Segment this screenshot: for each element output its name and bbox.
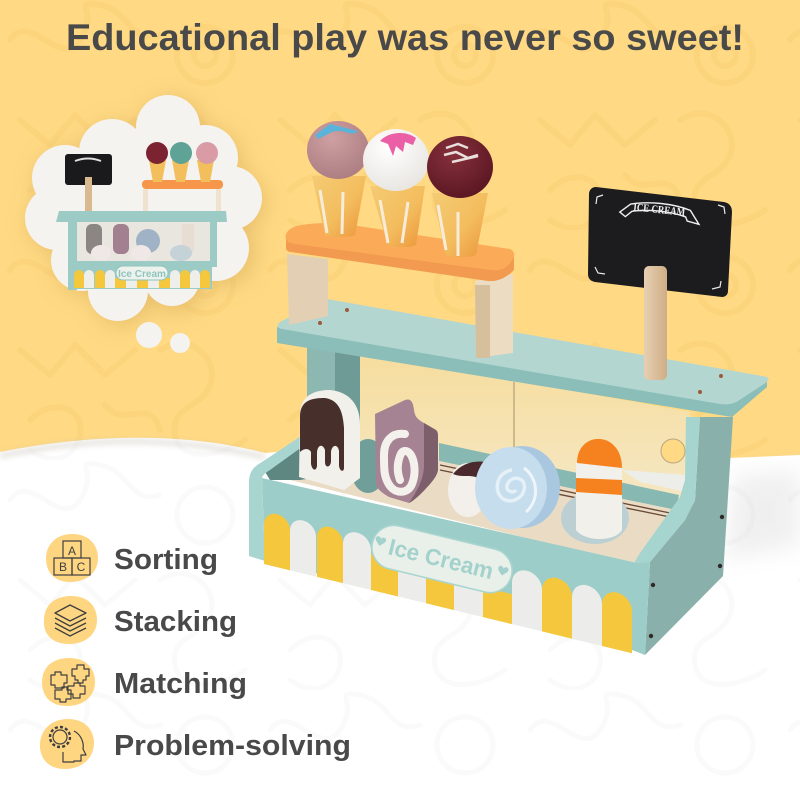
label: problem-solving: Problem-solving xyxy=(114,730,351,762)
bubble cloud xyxy=(25,95,262,353)
teal scoop behind popsicle xyxy=(350,439,386,493)
title: Educational play was never so sweet! xyxy=(66,17,744,58)
tray slot lines xyxy=(440,465,670,517)
front panel xyxy=(262,478,650,655)
label: stacking: Stacking xyxy=(114,606,237,638)
label: matching: Matching xyxy=(114,668,247,700)
skill: sorting xyxy=(46,534,218,582)
icon: abc blocks: A xyxy=(68,544,76,558)
mini counter xyxy=(56,211,227,290)
label: sorting: Sorting xyxy=(114,544,218,576)
chalkboard sign xyxy=(588,187,732,297)
popsicle: chocolate xyxy=(299,390,360,490)
right side panel xyxy=(645,417,733,655)
back rail xyxy=(439,443,679,510)
orange white bottle xyxy=(561,439,629,544)
mini stripes xyxy=(74,270,210,288)
skill: problem-solving xyxy=(40,719,351,769)
cone 2 xyxy=(370,186,425,247)
white scoop xyxy=(448,462,488,517)
left front edge xyxy=(249,434,306,561)
ice cream label: Ice Cream xyxy=(386,534,496,584)
scoop 3 xyxy=(427,136,493,198)
icon: layers xyxy=(44,596,97,644)
cone 3 xyxy=(432,193,488,257)
mirror lower reflection xyxy=(622,470,686,492)
icon: abc blocks: B xyxy=(59,560,67,574)
orange shelf xyxy=(285,223,514,281)
tray left wall shadow xyxy=(264,438,360,480)
back mirror xyxy=(358,352,690,510)
mini label: Ice Cream xyxy=(118,269,166,280)
skill: matching xyxy=(42,658,247,706)
swirl roll xyxy=(475,446,560,529)
icon: abc blocks: C xyxy=(77,560,86,574)
skills list xyxy=(40,534,351,769)
mini sign xyxy=(65,154,112,214)
icon: head with gear xyxy=(40,719,94,769)
right side front edge xyxy=(634,417,700,563)
awning stripes xyxy=(264,507,632,653)
cone 1 xyxy=(312,176,366,237)
mini cones and shelf xyxy=(142,142,223,215)
thought bubble xyxy=(25,95,265,353)
icon: puzzle pieces xyxy=(42,658,95,706)
skill: stacking xyxy=(44,596,237,644)
sign peg xyxy=(644,266,667,380)
teal upper shelf xyxy=(277,299,769,417)
tray interior xyxy=(290,455,696,565)
sign banner xyxy=(619,199,701,224)
shelf posts xyxy=(287,254,513,358)
toy ice cream stand xyxy=(249,121,769,655)
side rivets xyxy=(649,515,724,638)
ice cream label xyxy=(367,521,517,597)
scoop 2 xyxy=(363,129,429,191)
left pillar xyxy=(307,340,335,445)
mirror hole xyxy=(661,439,685,463)
popsicle: purple swirl xyxy=(375,399,438,503)
sign corner flourishes xyxy=(595,195,725,289)
icon: abc blocks xyxy=(46,534,98,582)
sign banner: ICE CREAM xyxy=(633,201,686,219)
bubble shadow xyxy=(29,98,265,325)
scoop 1 xyxy=(307,121,369,179)
